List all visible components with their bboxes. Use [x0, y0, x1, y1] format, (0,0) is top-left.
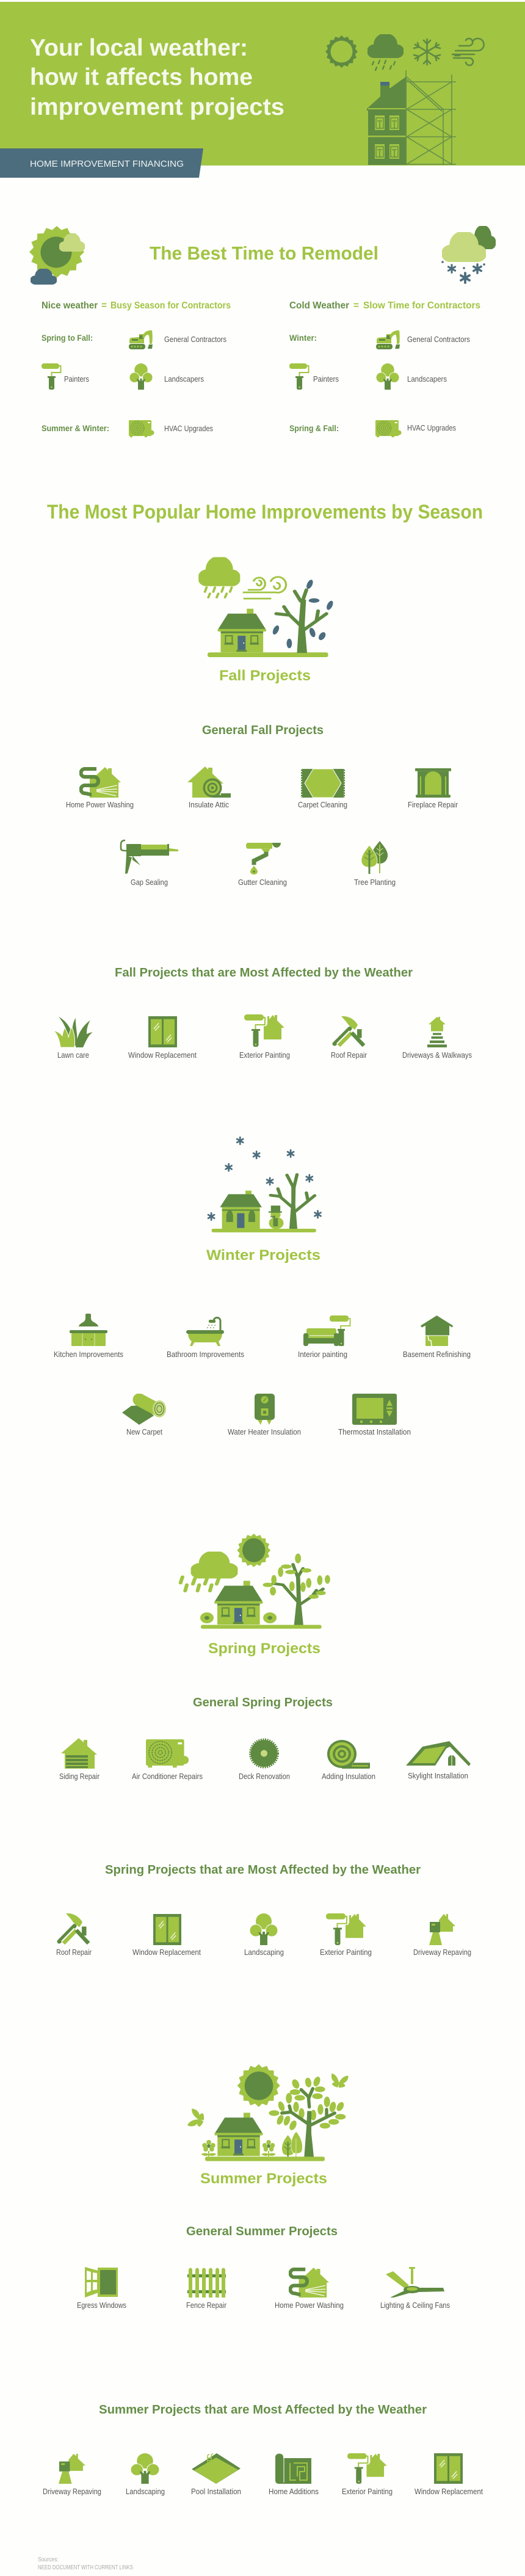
heading: summer projects: Summer Projects: [200, 2170, 327, 2187]
title: [30, 35, 284, 120]
item: adding insulation: Adding Insulation: [322, 1772, 375, 1781]
heading: spring projects: Spring Projects: [208, 1640, 320, 1657]
panel: cold weather column: [278, 300, 496, 446]
panel: fall projects most affected by the weather: [29, 944, 496, 1093]
item: tree planting: Tree Planting: [354, 878, 396, 887]
item: air conditioner repairs: Air Conditioner Repairs: [132, 1772, 203, 1781]
heading: nice weather equals busy season: =: [101, 300, 107, 311]
item: home power washing: [66, 767, 134, 809]
item: landscapers: Landscapers: [407, 375, 447, 384]
item: exterior painting: [239, 1014, 290, 1060]
item: deck renovation: Deck Renovation: [239, 1772, 290, 1781]
label: summer and winter: Summer & Winter:: [42, 423, 109, 433]
icon: rain cloud: [367, 33, 404, 70]
item: egress windows: Egress Windows: [77, 2301, 126, 2310]
item: general contractors: [129, 330, 226, 349]
item: air conditioner repairs: [132, 1739, 203, 1781]
item: water heater insulation: [228, 1394, 301, 1436]
heading: cold weather equals slow time: [289, 300, 480, 311]
heading: the most popular home improvements by season: The Most Popular Home Improvements by Season: [47, 501, 483, 523]
icon: snowflake: [414, 39, 440, 65]
item: hvac upgrades: [375, 420, 456, 437]
heading: cold weather equals slow time: Cold Weather: [289, 300, 349, 311]
item: new carpet: [122, 1400, 166, 1436]
item: lawn care: Lawn care: [57, 1051, 89, 1060]
label: winter: Winter:: [289, 333, 317, 343]
item: thermostat installation: [338, 1394, 411, 1436]
icon: snow clouds: [441, 225, 496, 283]
item: basement refinishing: Basement Refinishing: [403, 1350, 471, 1359]
item: tree planting: [354, 841, 396, 887]
heading: summer projects most affected: Summer Projects that are Most Affected by the Weather: [99, 2403, 427, 2417]
item: exterior painting: Exterior Painting: [342, 2487, 393, 2496]
item: painters: [42, 363, 89, 390]
item: home additions: [269, 2454, 319, 2496]
heading: general summer projects: General Summer Projects: [186, 2224, 338, 2238]
item: driveway repaving: [413, 1914, 471, 1957]
item: driveway repaving: [43, 2454, 101, 2496]
illustration: spring scene: [181, 1534, 330, 1629]
item: landscaping: [126, 2453, 165, 2496]
item: landscapers: Landscapers: [164, 375, 204, 384]
item: general contractors: [376, 330, 470, 349]
item: roof repair: [331, 1016, 367, 1060]
label: spring and fall: Spring & Fall:: [289, 423, 339, 433]
item: fireplace repair: [408, 768, 458, 809]
item: lighting and ceiling fans: [380, 2267, 450, 2310]
item: skylight installation: Skylight Installation: [408, 1772, 468, 1780]
item: driveways and walkways: Driveways & Walkways: [402, 1051, 472, 1060]
heading: nice weather equals busy season: Busy Season for Contractors: [110, 300, 231, 311]
item: egress windows: [77, 2267, 126, 2310]
item: carpet cleaning: [298, 769, 347, 809]
heading: general fall projects: General Fall Projects: [202, 723, 324, 737]
item: roof repair: Roof Repair: [56, 1948, 92, 1957]
icon: sun outline: [325, 35, 358, 68]
item: landscaping: [244, 1913, 284, 1957]
item: pool installation: Pool Installation: [191, 2487, 241, 2496]
item: window replacement: Window Replacement: [415, 2487, 483, 2496]
illustration: fall scene: [198, 556, 335, 657]
item: landscaping: Landscaping: [126, 2487, 165, 2496]
item: fireplace repair: Fireplace Repair: [408, 801, 458, 809]
illustration: house under scaffolding: [367, 70, 456, 165]
heading: nice weather equals busy season: Nice weather: [42, 300, 98, 311]
header panel: [0, 2, 525, 178]
item: home power washing: [275, 2268, 344, 2310]
panel: general spring projects: [29, 1679, 496, 1802]
item: painters: [289, 363, 339, 390]
item: painters: Painters: [313, 375, 339, 384]
item: exterior painting: [320, 1913, 372, 1957]
item: deck renovation: [239, 1740, 290, 1781]
sources: [38, 2556, 133, 2571]
panel: general fall projects: [29, 705, 496, 910]
item: insulate attic: [187, 766, 231, 809]
item: exterior painting: Exterior Painting: [239, 1051, 290, 1060]
heading: fall projects: Fall Projects: [219, 668, 311, 684]
section: the best time to remodel: [29, 225, 496, 446]
item: bathroom improvements: Bathroom Improvements: [167, 1350, 244, 1359]
title: how it affects home: [30, 64, 253, 90]
heading: spring projects most affected: Spring Projects that are Most Affected by the Weather: [105, 1863, 421, 1877]
item: landscaping: Landscaping: [244, 1948, 284, 1957]
item: bathroom improvements: [167, 1318, 244, 1359]
panel: general summer projects: [34, 2205, 491, 2348]
item: adding insulation: [322, 1740, 375, 1781]
item: gap sealing: Gap Sealing: [131, 878, 168, 887]
illustration: winter scene: [208, 1137, 321, 1232]
item: gutter cleaning: Gutter Cleaning: [238, 878, 287, 887]
heading: cold weather equals slow time: Slow Time for Contractors: [363, 300, 480, 311]
banner: home improvement financing: [0, 148, 203, 178]
sources: NEED DOCUMENT WITH CURRENT LINKS: [38, 2564, 133, 2571]
item: driveway repaving: Driveway Repaving: [43, 2487, 101, 2496]
panel: spring projects most affected by the weather: [29, 1841, 496, 1988]
item: fence repair: Fence Repair: [186, 2301, 226, 2310]
heading: winter projects: Winter Projects: [206, 1247, 320, 1264]
heading: nice weather equals busy season: [42, 300, 231, 311]
item: home power washing: Home Power Washing: [66, 801, 134, 809]
heading: the best time to remodel: The Best Time to Remodel: [150, 242, 378, 264]
icon: wind: [452, 38, 484, 65]
item: lighting and ceiling fans: Lighting & Ceiling Fans: [380, 2301, 450, 2310]
item: water heater insulation: Water Heater Insulation: [228, 1428, 301, 1436]
item: roof repair: [56, 1913, 92, 1957]
item: thermostat installation: Thermostat Installation: [338, 1428, 411, 1436]
heading: cold weather equals slow time: =: [353, 300, 359, 311]
illustration: summer scene: [187, 2064, 349, 2161]
item: exterior painting: [342, 2453, 393, 2496]
panel: summer projects most affected by the weather: [34, 2385, 491, 2534]
item: landscapers: [376, 363, 447, 390]
item: gap sealing: [121, 840, 178, 887]
item: painters: Painters: [64, 375, 89, 384]
item: window replacement: [132, 1914, 201, 1957]
item: roof repair: Roof Repair: [331, 1051, 367, 1060]
item: window replacement: Window Replacement: [128, 1051, 197, 1060]
banner: home improvement financing: HOME IMPROVEMENT FINANCING: [30, 159, 184, 169]
item: carpet cleaning: Carpet Cleaning: [298, 801, 347, 809]
item: interior painting: Interior painting: [298, 1350, 347, 1359]
item: landscapers: [129, 363, 204, 390]
item: driveway repaving: Driveway Repaving: [413, 1948, 471, 1957]
item: interior painting: [298, 1315, 350, 1359]
item: window replacement: Window Replacement: [132, 1948, 201, 1957]
item: new carpet: New Carpet: [126, 1428, 162, 1436]
heading: fall projects most affected: Fall Projects that are Most Affected by the Weather: [115, 966, 413, 980]
title: improvement projects: [30, 94, 284, 120]
item: gutter cleaning: [238, 843, 287, 887]
sources: Sources:: [38, 2556, 59, 2563]
item: kitchen improvements: [54, 1314, 123, 1359]
item: insulate attic: Insulate Attic: [189, 801, 229, 809]
item: kitchen improvements: Kitchen Improvements: [54, 1350, 123, 1359]
label: spring to fall: Spring to Fall:: [42, 333, 93, 343]
item: window replacement: [128, 1016, 197, 1060]
item: exterior painting: Exterior Painting: [320, 1948, 372, 1957]
item: general contractors: General Contractors: [164, 335, 226, 344]
item: hvac upgrades: HVAC Upgrades: [407, 424, 456, 432]
item: hvac upgrades: [129, 420, 213, 437]
item: general contractors: General Contractors: [407, 335, 470, 344]
item: lawn care: [54, 1017, 93, 1060]
item: siding repair: [59, 1738, 100, 1781]
item: window replacement: [415, 2453, 483, 2496]
panel: winter projects: [29, 1283, 496, 1469]
item: home power washing: Home Power Washing: [275, 2301, 344, 2310]
item: siding repair: Siding Repair: [59, 1772, 100, 1781]
item: pool installation: [191, 2453, 241, 2496]
item: hvac upgrades: HVAC Upgrades: [164, 424, 213, 433]
item: driveways and walkways: [402, 1017, 472, 1060]
heading: general spring projects: General Spring Projects: [193, 1695, 333, 1709]
item: home additions: Home Additions: [269, 2487, 319, 2496]
item: fence repair: [186, 2268, 226, 2310]
icon: sun with clouds: [29, 226, 85, 285]
item: basement refinishing: [403, 1315, 471, 1359]
title: Your local weather:: [30, 35, 248, 61]
item: skylight installation: [406, 1741, 471, 1780]
panel: nice weather column: [29, 300, 256, 446]
